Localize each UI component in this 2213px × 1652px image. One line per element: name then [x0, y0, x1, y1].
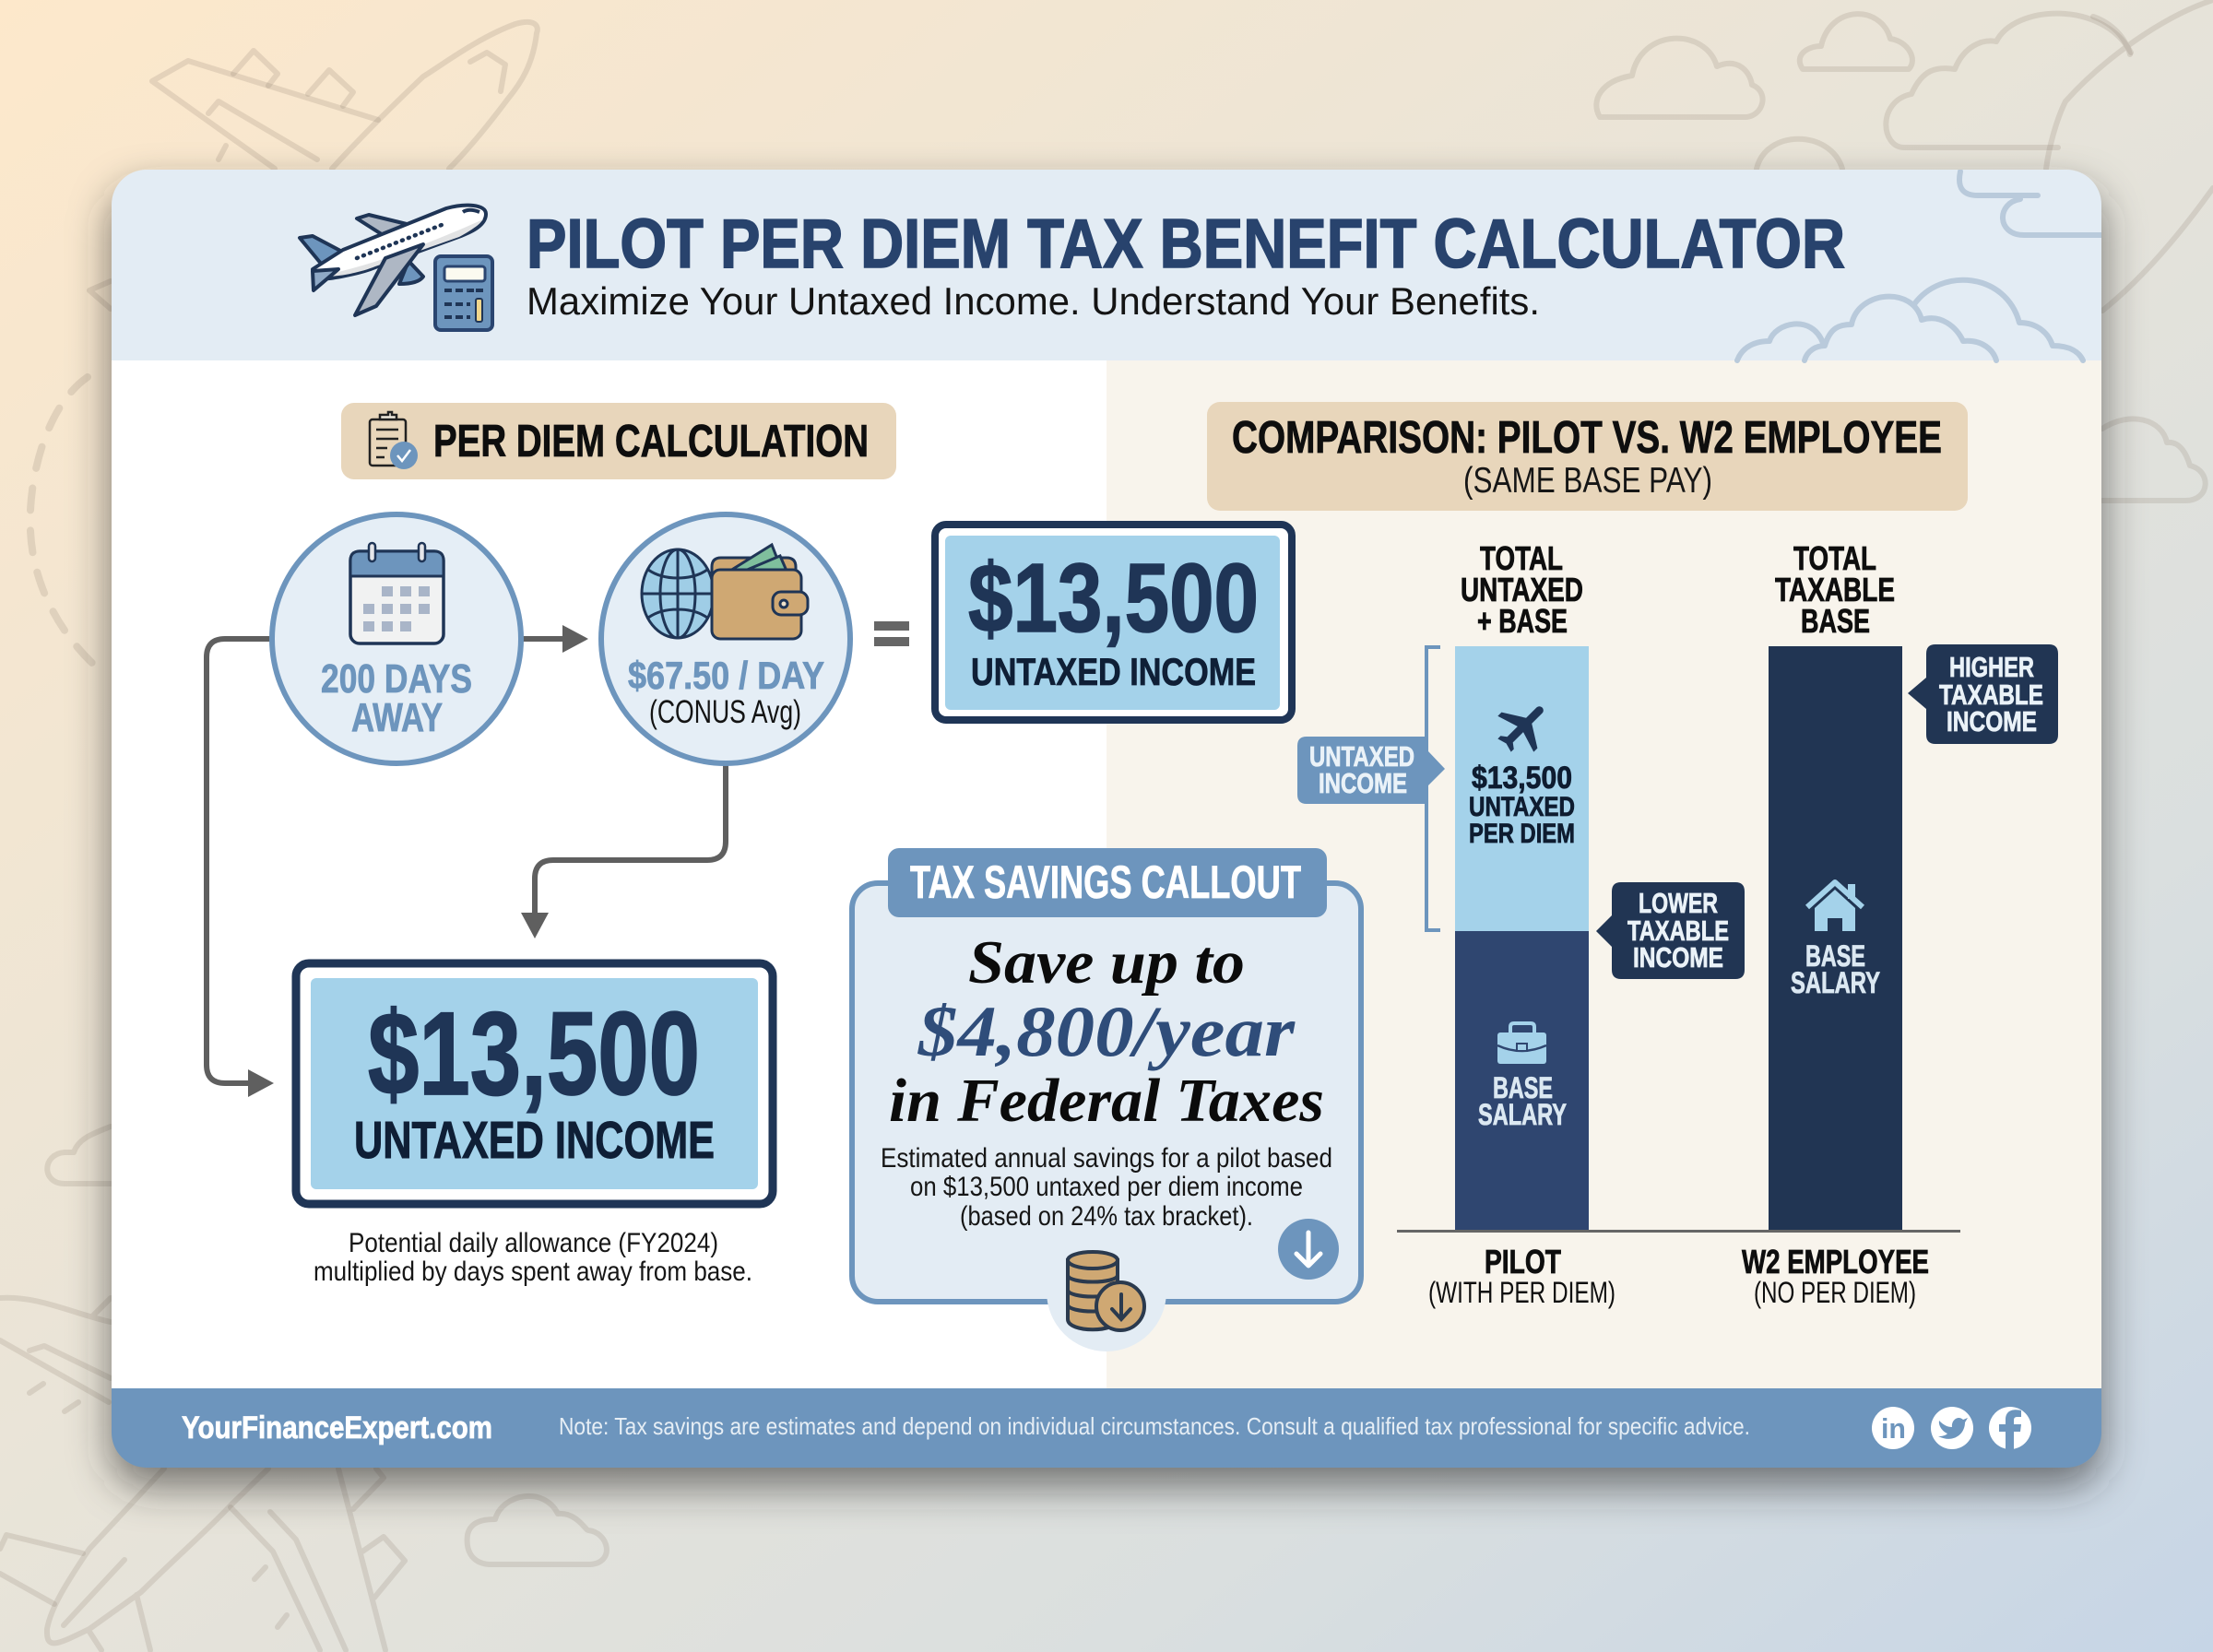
column header: W2: TOTAL [1793, 539, 1876, 577]
icon: linkedin [1872, 1407, 1914, 1449]
result box: bottom: UNTAXED INCOME [354, 1111, 715, 1170]
icon: briefcase [1497, 1023, 1546, 1064]
callout headline [889, 928, 1324, 1135]
callout tab: TAX SAVINGS CALLOUT [910, 856, 1301, 908]
heading: comparison: COMPARISON: PILOT VS. W2 EMPLOYEE [1232, 413, 1942, 463]
caption: multiplied by days spent away from base. [314, 1257, 752, 1287]
callout: untaxed income: INCOME [1319, 767, 1407, 799]
column header: pilot: TOTAL [1480, 539, 1563, 577]
circle: daily rate: (CONUS Avg) [649, 694, 801, 730]
icon: house [1807, 882, 1863, 931]
column header: pilot [1461, 539, 1583, 640]
callout headline: in Federal Taxes [889, 1067, 1324, 1135]
equals sign [874, 621, 909, 646]
axis label: W2 employee: (NO PER DIEM) [1754, 1276, 1916, 1309]
callout headline: Save up to [968, 928, 1245, 997]
arrow: days to total [207, 639, 274, 1097]
axis label: W2 employee: W2 EMPLOYEE [1742, 1243, 1929, 1280]
icon: facebook [1989, 1407, 2031, 1449]
axis label: W2 employee [1742, 1243, 1929, 1309]
bar: pilot untaxed per diem: PER DIEM [1469, 819, 1575, 849]
icon: down arrow [1278, 1219, 1339, 1280]
callout: higher taxable income: INCOME [1947, 705, 2037, 738]
callout: untaxed income: UNTAXED [1309, 740, 1414, 773]
bar: pilot base salary [1455, 931, 1589, 1232]
header band [112, 170, 2102, 360]
result box: bottom: $13,500 [368, 988, 700, 1120]
icon: airplane and calculator [300, 206, 492, 330]
callout: higher taxable income [1908, 644, 2058, 744]
axis label: pilot: (WITH PER DIEM) [1428, 1276, 1615, 1309]
main card [112, 170, 2102, 1468]
circle: 200 days away: 200 DAYS [321, 656, 472, 702]
callout: higher taxable income: TAXABLE [1939, 678, 2043, 711]
column header: pilot: UNTAXED [1461, 571, 1583, 608]
callout headline: $4,800/year [917, 991, 1296, 1071]
icon: airplane [300, 206, 486, 315]
airplane windows [357, 223, 446, 258]
icon: calendar [350, 543, 444, 643]
bracket: untaxed income [1426, 647, 1440, 930]
caption: Potential daily allowance (FY2024) [349, 1228, 718, 1258]
heading: comparison: (SAME BASE PAY) [1463, 461, 1712, 501]
callout description [881, 1143, 1332, 1232]
circle: 200 days away: AWAY [351, 695, 443, 740]
icon: clipboard with check [370, 412, 418, 469]
callout: lower taxable income: LOWER [1639, 887, 1718, 919]
bar chart: pilot vs W2 employee [1297, 539, 2058, 1309]
header decoration: clouds and swirls [1737, 171, 2102, 360]
right panel background [1106, 360, 2101, 1388]
circle: daily rate [601, 514, 850, 763]
title: PILOT PER DIEM TAX BENEFIT CALCULATOR [527, 205, 1845, 282]
callout tab [888, 848, 1327, 917]
social icons [1872, 1407, 2031, 1449]
panel: tax savings callout [852, 848, 1361, 1351]
heading: comparison [1207, 402, 1968, 511]
result box: top: $13,500 [968, 544, 1259, 653]
arrow: days to rate [521, 625, 588, 653]
circle: daily rate: $67.50 / DAY [628, 654, 824, 697]
column header: pilot: + BASE [1477, 602, 1568, 640]
bar: pilot untaxed per diem: UNTAXED [1469, 792, 1575, 822]
icon: globe [642, 549, 714, 638]
bar: pilot base salary: BASE [1493, 1071, 1553, 1104]
subtitle: Maximize Your Untaxed Income. Understand Your Benefits. [527, 279, 1540, 323]
caption [314, 1228, 752, 1287]
icon: calculator [435, 256, 492, 330]
bar: W2 base salary [1769, 646, 1902, 1232]
result box: top [935, 525, 1292, 720]
callout: lower taxable income: TAXABLE [1627, 914, 1729, 947]
circle: 200 days away [272, 514, 521, 763]
bar: pilot untaxed per diem [1455, 646, 1589, 931]
icon: linkedin: in [1881, 1412, 1906, 1445]
footer band [112, 1388, 2101, 1468]
heading: per diem calculation [341, 403, 896, 479]
result box: bottom [296, 963, 773, 1204]
callout description: (based on 24% tax bracket). [960, 1201, 1253, 1232]
callout: lower taxable income [1596, 882, 1745, 979]
callout description: on $13,500 untaxed per diem income [910, 1172, 1303, 1202]
icon: twitter [1931, 1407, 1973, 1449]
left panel background [112, 360, 1106, 1388]
bar: W2 base salary: SALARY [1791, 966, 1880, 999]
chart baseline [1397, 1230, 1960, 1233]
bar: W2 base salary: BASE [1805, 939, 1865, 973]
arrow: rate to total [521, 764, 726, 938]
column header: W2: TAXABLE [1775, 571, 1895, 608]
footer note: Note: Tax savings are estimates and depend on individual circumstances. Consult a qualified tax professional for specific advice. [559, 1412, 1750, 1440]
callout description: Estimated annual savings for a pilot based [881, 1143, 1332, 1174]
coin bump [1047, 1232, 1166, 1351]
column header: W2 [1775, 539, 1895, 640]
footer brand: YourFinanceExpert.com [182, 1410, 492, 1446]
callout: higher taxable income: HIGHER [1949, 651, 2034, 683]
column header: W2: BASE [1801, 602, 1870, 640]
axis label: pilot [1428, 1243, 1615, 1309]
callout: lower taxable income: INCOME [1633, 941, 1723, 974]
icon: small plane [1486, 690, 1560, 763]
bar: pilot base salary: SALARY [1478, 1098, 1567, 1131]
heading: per diem calculation: PER DIEM CALCULATION [433, 417, 869, 466]
bar: pilot untaxed per diem: $13,500 [1472, 761, 1572, 796]
result box: top: UNTAXED INCOME [971, 650, 1256, 693]
icon: wallet with cash [712, 545, 808, 639]
card shadow [111, 189, 2102, 1487]
axis label: pilot: PILOT [1485, 1243, 1561, 1280]
callout: untaxed income [1297, 737, 1445, 804]
icon: coins [1068, 1252, 1144, 1330]
